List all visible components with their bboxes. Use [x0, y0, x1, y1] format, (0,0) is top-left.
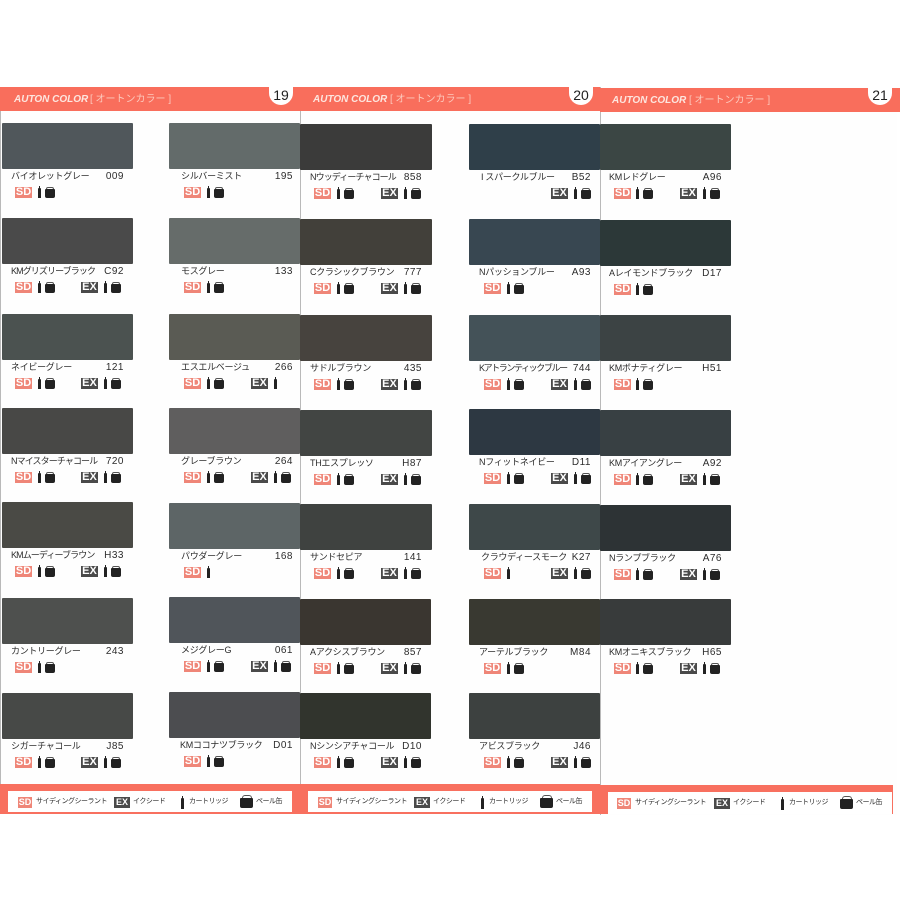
- legend: page 21: ペール缶: [856, 799, 882, 806]
- swatch card: C92: SD: [16, 281, 31, 293]
- swatch card: H87: [300, 410, 432, 485]
- swatch card: A96: [600, 124, 731, 199]
- header: page 20: 20: [573, 87, 589, 103]
- swatch card: 061: [169, 597, 300, 672]
- swatch card: B52: [469, 124, 600, 199]
- swatch card: K27: [469, 504, 600, 579]
- swatch card: 195: 195: [275, 171, 293, 182]
- header: page 19: 19: [273, 87, 289, 103]
- swatch card: 133: SD: [185, 281, 200, 293]
- swatch card: 858: EX: [382, 187, 397, 199]
- swatch card: K27: K27: [572, 552, 591, 563]
- swatch card: A93: [469, 219, 600, 294]
- swatch card: 168: パウダーグレー: [181, 551, 242, 561]
- swatch card: H51: SD: [615, 378, 630, 390]
- legend: page 20: サイディングシーラント: [336, 798, 407, 805]
- swatch card: 777: 777: [404, 267, 422, 278]
- swatch card: B52: B52: [572, 172, 591, 183]
- legend: page 21: EX: [716, 798, 728, 808]
- header: page 21: AUTON COLOR: [612, 95, 686, 106]
- swatch card: 195: シルバーミスト: [181, 171, 242, 181]
- swatch card: J46: J46: [573, 741, 591, 752]
- swatch card: 141: サンドセピア: [310, 552, 362, 562]
- swatch card: H51: H51: [702, 363, 722, 374]
- swatch card: D17: D17: [702, 268, 722, 279]
- swatch card: D01: [169, 692, 300, 767]
- swatch card: A96: EX: [681, 187, 696, 199]
- swatch card: M84: [469, 599, 600, 674]
- swatch card: 061: 061: [275, 645, 293, 656]
- header: page 19: [ オートンカラー ]: [90, 94, 171, 105]
- swatch card: 061: EX: [252, 660, 267, 672]
- swatch card: A96: KMレドグレー: [609, 172, 665, 182]
- legend: page 20: ペール缶: [556, 798, 582, 805]
- swatch card: H65: [600, 599, 731, 674]
- header: page 21: 21: [872, 87, 888, 103]
- swatch card: 168: [169, 503, 300, 578]
- swatch card: 243: [2, 598, 133, 673]
- swatch card: 266: エスエルベージュ: [181, 362, 250, 372]
- swatch card: M84: アーテルブラック: [479, 647, 548, 657]
- swatch card: D01: D01: [273, 740, 293, 751]
- header: page 20: [300, 87, 600, 111]
- swatch card: 266: EX: [252, 377, 267, 389]
- swatch card: B52: I スパークルブルー: [481, 172, 555, 182]
- swatch card: J85: EX: [82, 756, 97, 768]
- swatch card: 243: SD: [16, 661, 31, 673]
- swatch card: A92: [600, 410, 731, 485]
- swatch card: 133: モスグレー: [181, 266, 225, 276]
- swatch card: A93: A93: [572, 267, 591, 278]
- swatch card: 720: EX: [82, 471, 97, 483]
- swatch card: J46: [469, 693, 600, 768]
- swatch card: H87: EX: [382, 473, 397, 485]
- swatch card: H65: SD: [615, 662, 630, 674]
- swatch card: A96: SD: [615, 187, 630, 199]
- swatch card: 121: EX: [82, 377, 97, 389]
- legend: page 21: カートリッジ: [789, 799, 828, 806]
- swatch card: J85: [2, 693, 133, 768]
- swatch card: 744: 744: [573, 363, 591, 374]
- swatch card: 141: 141: [404, 552, 422, 563]
- swatch card: 858: Nウッディーチャコール: [310, 172, 396, 182]
- header: page 21: [ オートンカラー ]: [689, 95, 770, 106]
- swatch card: H65: H65: [702, 647, 722, 658]
- header: page 21: [600, 88, 900, 112]
- legend: page 19: ペール缶: [256, 798, 282, 805]
- swatch card: 858: 858: [404, 172, 422, 183]
- swatch card: 744: EX: [552, 378, 567, 390]
- swatch card: 777: [300, 219, 432, 294]
- swatch card: 141: SD: [315, 567, 330, 579]
- swatch card: H65: EX: [681, 662, 696, 674]
- swatch card: H51: KMボナティグレー: [609, 363, 682, 373]
- swatch card: D17: Aレイモンドブラック: [609, 268, 693, 278]
- swatch card: D11: D11: [572, 457, 591, 468]
- header: page 20: AUTON COLOR: [313, 94, 387, 105]
- swatch card: D11: SD: [485, 472, 500, 484]
- swatch card: 168: 168: [275, 551, 293, 562]
- legend: page 21: SD: [618, 798, 630, 808]
- swatch card: D17: SD: [615, 283, 630, 295]
- swatch card: 009: バイオレットグレー: [11, 171, 89, 181]
- swatch card: D11: [469, 409, 600, 484]
- swatch card: C92: KMグリズリーブラック: [11, 266, 95, 276]
- legend: page 19: サイディングシーラント: [36, 798, 107, 805]
- header: page 20: [ オートンカラー ]: [390, 94, 471, 105]
- swatch card: 243: カントリーグレー: [11, 646, 81, 656]
- swatch card: K27: EX: [552, 567, 567, 579]
- swatch card: J46: SD: [485, 756, 500, 768]
- swatch card: A92: A92: [703, 458, 722, 469]
- swatch card: 857: SD: [315, 662, 330, 674]
- swatch card: 009: 009: [106, 171, 124, 182]
- swatch card: D10: EX: [382, 756, 397, 768]
- swatch card: H33: SD: [16, 565, 31, 577]
- swatch card: A76: EX: [681, 568, 696, 580]
- swatch card: 243: 243: [106, 646, 124, 657]
- swatch card: 133: 133: [275, 266, 293, 277]
- swatch card: H33: [2, 502, 133, 577]
- swatch card: 121: ネイビーグレー: [11, 362, 72, 372]
- swatch card: M84: SD: [485, 662, 500, 674]
- header: page 19: AUTON COLOR: [14, 94, 88, 105]
- swatch card: 168: SD: [185, 566, 200, 578]
- swatch card: J85: J85: [106, 741, 124, 752]
- swatch card: D10: Nシンシアチャコール: [310, 741, 394, 751]
- swatch card: K27: SD: [485, 567, 500, 579]
- panel: page 19: [0, 87, 300, 814]
- swatch card: C92: EX: [82, 281, 97, 293]
- swatch card: D10: [300, 693, 431, 768]
- swatch card: D01: SD: [185, 755, 200, 767]
- swatch card: 141: [300, 504, 432, 579]
- legend: page 19: イクシード: [133, 798, 165, 805]
- swatch card: D11: Nフィットネイビー: [479, 457, 555, 467]
- swatch card: J46: アビスブラック: [479, 741, 540, 751]
- legend: page 21: [600, 785, 893, 814]
- swatch card: 858: [300, 124, 432, 199]
- swatch card: 266: SD: [185, 377, 200, 389]
- legend: page 20: カートリッジ: [489, 798, 528, 805]
- swatch card: 195: [169, 123, 300, 198]
- swatch card: 777: Cクラシックブラウン: [310, 267, 394, 277]
- swatch card: A92: KMアイアングレー: [609, 458, 682, 468]
- swatch card: 141: EX: [382, 567, 397, 579]
- swatch card: J85: シガーチャコール: [11, 741, 81, 751]
- swatch card: A92: EX: [681, 473, 696, 485]
- swatch card: 857: EX: [382, 662, 397, 674]
- swatch card: 720: 720: [106, 456, 124, 467]
- swatch card: 777: SD: [315, 282, 330, 294]
- panel: page 20: [300, 87, 600, 814]
- swatch card: A93: Nパッションブルー: [479, 267, 555, 277]
- legend: page 21: サイディングシーラント: [635, 799, 706, 806]
- swatch card: 720: SD: [16, 471, 31, 483]
- swatch card: 061: メジグレーG: [181, 645, 231, 655]
- swatch card: 744: [469, 315, 600, 390]
- swatch card: 857: [300, 599, 431, 674]
- swatch card: 857: Aアクシスブラウン: [310, 647, 385, 657]
- swatch card: A92: SD: [615, 473, 630, 485]
- swatch card: D01: KMココナツブラック: [180, 740, 263, 750]
- swatch card: 435: サドルブラウン: [310, 363, 371, 373]
- swatch card: 266: 266: [275, 362, 293, 373]
- swatch card: J85: SD: [16, 756, 31, 768]
- swatch card: 009: SD: [16, 186, 31, 198]
- swatch card: 858: SD: [315, 187, 330, 199]
- swatch card: H87: H87: [402, 458, 422, 469]
- swatch card: D11: EX: [552, 472, 567, 484]
- header: page 19: [0, 87, 300, 111]
- swatch card: H51: [600, 315, 731, 390]
- legend: page 20: [300, 784, 600, 814]
- swatch card: A76: SD: [615, 568, 630, 580]
- swatch card: B52: EX: [552, 187, 567, 199]
- swatch card: 061: SD: [185, 660, 200, 672]
- swatch card: H33: KMムーディーブラウン: [11, 550, 94, 560]
- swatch card: H87: THエスプレッソ: [310, 458, 374, 468]
- swatch card: 264: グレーブラウン: [181, 456, 241, 466]
- swatch card: 857: 857: [404, 647, 422, 658]
- legend: page 19: SD: [19, 797, 31, 807]
- swatch card: 264: [169, 408, 300, 483]
- swatch card: 195: SD: [185, 186, 200, 198]
- swatch card: A76: Nランプブラック: [609, 553, 676, 563]
- swatch card: H33: H33: [104, 550, 124, 561]
- panel: page 21: [600, 87, 897, 815]
- swatch card: 009: [2, 123, 133, 198]
- swatch card: A76: [600, 505, 731, 580]
- legend: page 20: EX: [416, 797, 428, 807]
- swatch card: A96: A96: [703, 172, 722, 183]
- swatch card: 435: [300, 315, 432, 390]
- swatch card: 720: Nマイスターチャコール: [11, 456, 97, 466]
- legend: page 19: カートリッジ: [189, 798, 228, 805]
- legend: page 20: SD: [319, 797, 331, 807]
- swatch card: A76: A76: [703, 553, 722, 564]
- swatch card: 435: 435: [404, 363, 422, 374]
- swatch card: 720: [2, 408, 133, 483]
- swatch card: H65: KMオニキスブラック: [609, 647, 691, 657]
- swatch card: 121: 121: [106, 362, 124, 373]
- swatch card: D10: SD: [315, 756, 330, 768]
- swatch card: D10: D10: [402, 741, 422, 752]
- swatch card: 133: [169, 218, 300, 293]
- swatch card: 777: EX: [382, 282, 397, 294]
- swatch card: 266: [169, 314, 300, 389]
- legend: page 21: イクシード: [733, 799, 765, 806]
- swatch card: 264: 264: [275, 456, 293, 467]
- legend: page 19: EX: [116, 797, 128, 807]
- swatch card: 435: SD: [315, 378, 330, 390]
- swatch card: H33: EX: [82, 565, 97, 577]
- swatch card: 264: EX: [252, 471, 267, 483]
- swatch card: A93: SD: [485, 282, 500, 294]
- swatch card: 435: EX: [382, 378, 397, 390]
- swatch card: 121: SD: [16, 377, 31, 389]
- swatch card: H87: SD: [315, 473, 330, 485]
- legend: page 19: [0, 784, 300, 814]
- swatch card: 264: SD: [185, 471, 200, 483]
- swatch card: D17: [600, 220, 731, 295]
- swatch card: 744: Kアトランティックブルー: [479, 363, 567, 373]
- swatch card: C92: C92: [104, 266, 124, 277]
- swatch card: 744: SD: [485, 378, 500, 390]
- legend: page 20: イクシード: [433, 798, 465, 805]
- swatch card: K27: クラウディースモーク: [481, 552, 567, 562]
- swatch card: M84: M84: [570, 647, 591, 658]
- swatch card: J46: EX: [552, 756, 567, 768]
- swatch card: C92: [2, 218, 133, 293]
- swatch card: 121: [2, 314, 133, 389]
